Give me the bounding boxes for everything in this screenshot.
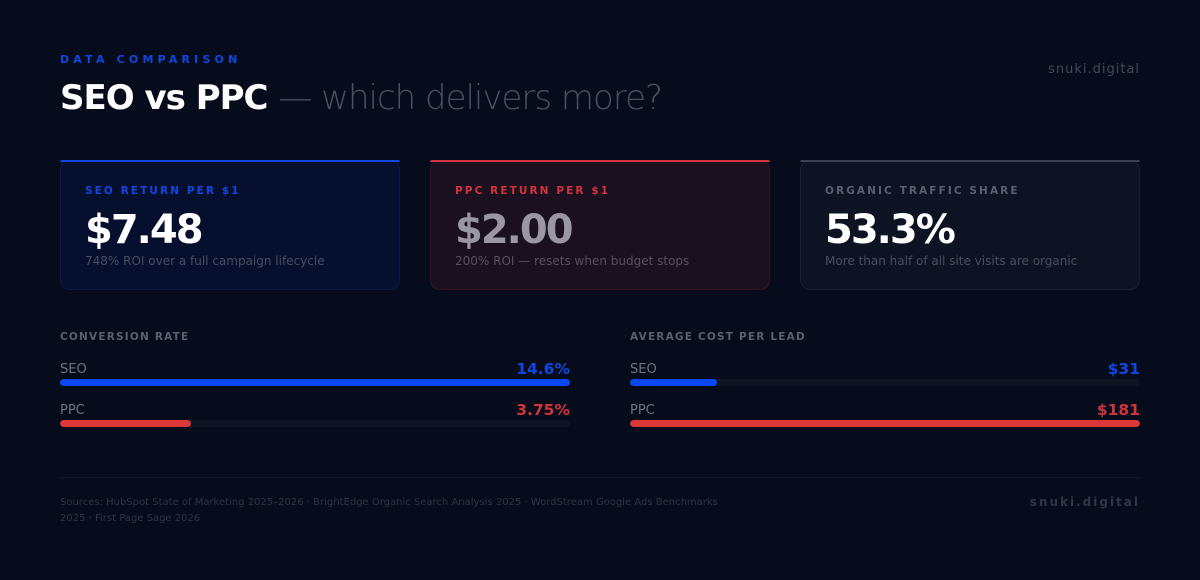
panel: organic share: [800, 160, 1140, 290]
label: SEO RETURN PER $1: [85, 185, 241, 197]
bar: conversion PPC: 3.75%: [516, 401, 570, 419]
description: More than half of all site visits are organic: [825, 254, 1077, 268]
panel: PPC return: [430, 160, 770, 290]
bar: conversion SEO: [60, 360, 570, 386]
value: 53.3%: [825, 207, 954, 253]
bar: conversion SEO: 14.6%: [516, 360, 570, 378]
label: PPC RETURN PER $1: [455, 185, 610, 197]
bar: conversion SEO: SEO: [60, 362, 87, 377]
sources: Sources: HubSpot State of Marketing 2025–2026 · BrightEdge Organic Search Analysis 2025 · WordStream Google Ads Benchmarks 2025 · First Page Sage 2026: [60, 497, 718, 524]
brand footer: snuki.digital: [1030, 495, 1140, 509]
panel: SEO return: [60, 160, 400, 290]
description: 200% ROI — resets when budget stops: [455, 254, 689, 268]
bar: cost SEO: $31: [1108, 360, 1140, 378]
brand top: snuki.digital: [1048, 62, 1140, 77]
bar: cost PPC: $181: [1097, 401, 1140, 419]
title: SEO vs PPC — which delivers more?: [60, 78, 662, 118]
heading: conversion rate: CONVERSION RATE: [60, 331, 189, 343]
bar: cost PPC: PPC: [630, 403, 655, 418]
value: $2.00: [455, 207, 572, 253]
heading: cost per lead: AVERAGE COST PER LEAD: [630, 331, 806, 343]
description: 748% ROI over a full campaign lifecycle: [85, 254, 325, 268]
label: ORGANIC TRAFFIC SHARE: [825, 185, 1020, 197]
bar: conversion PPC: [60, 401, 570, 427]
bar: cost SEO: [630, 360, 1140, 386]
bar: conversion PPC: PPC: [60, 403, 85, 418]
value: $7.48: [85, 207, 202, 253]
bar: cost SEO: SEO: [630, 362, 657, 377]
bar: cost PPC: [630, 401, 1140, 427]
eyebrow: DATA COMPARISON: [60, 53, 241, 66]
